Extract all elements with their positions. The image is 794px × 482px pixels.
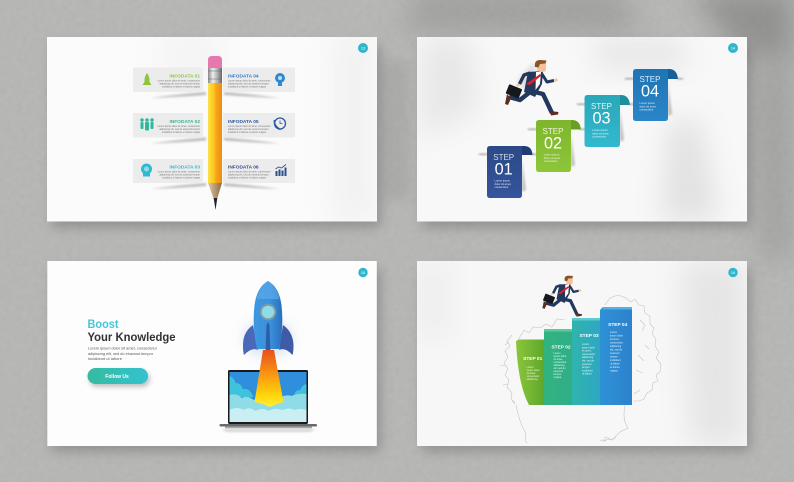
ribbon step 03 — [577, 95, 635, 147]
badge 15: 15 — [361, 271, 365, 275]
panel shadows — [52, 45, 750, 451]
bar step 03: sit amet, — [582, 350, 592, 353]
bar step 01: STEP 01 — [523, 356, 543, 362]
bar step 04: tempor — [610, 356, 618, 358]
head sketch outline — [500, 295, 661, 443]
bar step 02: magna — [554, 376, 562, 379]
ribbon step 04: STEP — [640, 75, 660, 84]
info card 03: incididunt ut labore et dolore magna — [162, 176, 201, 180]
body text: Lorem ipsum dolor sit amet, consectetur — [88, 346, 158, 350]
bar step 02: eiusmod — [554, 370, 564, 373]
badge 14: 14 — [731, 46, 735, 50]
ribbon step 01 — [479, 146, 537, 198]
bar step 04: ipsum dolor — [610, 334, 623, 338]
info card 06: adipiscing elit, sed do eiusmod tempor — [228, 174, 269, 176]
businessman running — [505, 60, 558, 116]
bar step 03: consectetur — [582, 353, 595, 356]
body text: adipiscing elit, sed do eiusmod tempor — [88, 352, 154, 356]
bar step 04: ut labore — [610, 362, 620, 366]
info card 06 — [223, 159, 295, 189]
ribbon step 04: 04 — [641, 82, 659, 100]
info card 05: Lorem ipsum dolor sit amet, consectetur — [228, 125, 271, 128]
slide 4: staircase bars on head sketch — [417, 261, 747, 446]
bar step 04: incididunt — [610, 359, 621, 362]
ribbon step 03: Lorem ipsum — [592, 128, 609, 132]
bar step 01: Lorem — [526, 366, 534, 369]
ribbon step 01: 01 — [495, 160, 513, 178]
info card 02: adipiscing elit, sed do eiusmod tempor — [159, 128, 200, 131]
ribbon step 02: dolor sit amet, — [544, 156, 561, 160]
bar step 02: Lorem — [554, 352, 561, 355]
icon: bar chart — [276, 164, 286, 176]
info card 04: adipiscing elit, sed do eiusmod tempor — [228, 82, 269, 86]
bar step 04: sit amet, — [610, 338, 620, 341]
bar step 02: consectetur — [554, 361, 567, 364]
info card 01: INFODATA 01 — [169, 74, 200, 80]
follow us button: Follow Us — [105, 374, 129, 380]
info card 02: INFODATA 02 — [169, 119, 200, 125]
bar step 03: tempor — [582, 366, 590, 369]
ribbon step 02: STEP — [543, 127, 563, 136]
bar step 03: ipsum dolor — [582, 346, 595, 349]
bar step 02: ipsum dolor — [554, 355, 567, 358]
info card 06: Lorem ipsum dolor sit amet, consectetur — [228, 170, 271, 174]
slide 1: pencil infodata — [47, 30, 380, 225]
bar step 02 — [544, 329, 575, 405]
ribbon step 04 — [625, 69, 683, 121]
ribbon step 01: consectetur — [494, 185, 508, 189]
icon: light bulb — [275, 73, 285, 86]
badge 16 — [728, 268, 738, 277]
info card 01: Lorem ipsum dolor sit amet, consectetur — [157, 80, 200, 82]
body text — [88, 346, 158, 361]
info card 04: Lorem ipsum dolor sit amet, consectetur — [228, 80, 271, 82]
bar step 03: ut labore — [582, 373, 592, 376]
info card 04: incididunt ut labore et dolore magna — [228, 86, 267, 88]
bar step 03 — [572, 318, 603, 405]
bar step 04: eiusmod — [610, 352, 620, 355]
ribbon step 04: dolor sit amet, — [640, 104, 657, 108]
bar step 01 — [516, 340, 547, 405]
ribbon step 03: consectetur — [592, 135, 606, 139]
slide 3: boost your knowledge — [47, 261, 377, 446]
info card 02: Lorem ipsum dolor sit amet, consectetur — [157, 125, 200, 128]
bar step 02: adipiscing — [554, 364, 565, 367]
bar step 04: magna — [610, 370, 618, 372]
bar step 04: Lorem — [610, 331, 617, 334]
ribbon step 03: STEP — [591, 102, 612, 111]
heading: Boost — [88, 319, 119, 331]
body text: incididunt ut labore — [88, 357, 122, 361]
pencil — [208, 56, 222, 210]
badge 13 — [358, 43, 368, 53]
bar step 01: Ipsum dolor — [526, 369, 540, 372]
bar step 03: adipiscing — [582, 356, 594, 359]
bar step 03: incididunt — [582, 369, 593, 372]
ribbon step 02: Lorem ipsum — [544, 152, 560, 156]
badge 13: 13 — [361, 46, 365, 50]
info card 02: incididunt ut labore et dolore magna — [162, 131, 201, 134]
bar step 02: elit, sed do — [554, 367, 566, 370]
follow us button — [88, 368, 150, 387]
bar step 04: adipiscing — [610, 345, 622, 348]
bar step 02: sit amet, — [554, 358, 563, 361]
ribbon step 03: 03 — [592, 109, 611, 127]
ribbon step 02 — [528, 120, 586, 172]
badge 16: 16 — [731, 271, 735, 275]
laptop with clouds and rocket flame — [220, 350, 317, 432]
info card 02 — [133, 113, 206, 144]
bar step 02: STEP 02 — [551, 345, 571, 351]
icon: people — [140, 118, 154, 130]
info card 05 — [223, 113, 295, 144]
icon: head — [141, 164, 152, 176]
ribbon step 04: Lorem ipsum — [640, 101, 656, 105]
bar step 04: STEP 04 — [608, 322, 628, 328]
badge 15 — [358, 268, 368, 277]
slide 2: step ribbons — [417, 37, 747, 222]
info card 03: adipiscing elit, sed do eiusmod tempor — [159, 174, 200, 176]
ribbon step 01: dolor sit amet, — [494, 182, 512, 186]
ribbon step 01: STEP — [493, 153, 514, 162]
info card 04 — [223, 68, 295, 98]
bar step 02: tempor — [554, 373, 561, 376]
info card 03: INFODATA 03 — [169, 164, 200, 170]
bar step 01: sit amet, — [526, 372, 536, 375]
info card 03: Lorem ipsum dolor sit amet, consectetur — [157, 170, 200, 174]
badge 14 — [728, 43, 738, 53]
bar step 04 — [600, 307, 632, 405]
ribbon step 02: 02 — [544, 134, 562, 152]
info card 05: adipiscing elit, sed do eiusmod tempor — [228, 128, 269, 131]
rocket — [243, 281, 294, 356]
heading: Your Knowledge — [88, 330, 176, 344]
businessman running on bars — [542, 276, 582, 317]
bar step 01: adipiscing — [526, 378, 538, 381]
bar step 04: consectetur — [610, 342, 623, 344]
bar step 03: STEP 03 — [579, 333, 599, 339]
ribbon step 03: dolor sit amet, — [592, 131, 609, 135]
bar step 03: Lorem — [582, 343, 589, 346]
icon: rocket — [142, 73, 152, 85]
ribbon step 02: consectetur — [544, 159, 558, 163]
info card 01 — [133, 68, 206, 98]
info card 06: incididunt ut labore et dolore magna — [228, 176, 267, 180]
info card 01: adipiscing elit, sed do eiusmod tempor — [159, 82, 200, 86]
ribbon step 04: consectetur — [640, 108, 653, 112]
info card 01: incididunt ut labore et dolore magna — [162, 86, 201, 88]
bar step 04: elit, sed do — [610, 348, 623, 352]
bar step 04: et dolore — [610, 366, 620, 369]
info card 06: INFODATA 06 — [228, 164, 259, 170]
ribbon step 01: Lorem ipsum — [494, 178, 511, 182]
icon: clock and phone — [274, 118, 286, 130]
info card 05: incididunt ut labore et dolore magna — [228, 131, 267, 134]
info card 04: INFODATA 04 — [228, 74, 259, 80]
bar step 01: consectetur — [526, 375, 540, 378]
info card 03 — [133, 159, 206, 189]
bar step 03: eiusmod — [582, 363, 592, 366]
heading — [88, 319, 176, 344]
info card 05: INFODATA 05 — [228, 119, 259, 125]
bar step 03: elit, sed do — [582, 360, 595, 362]
